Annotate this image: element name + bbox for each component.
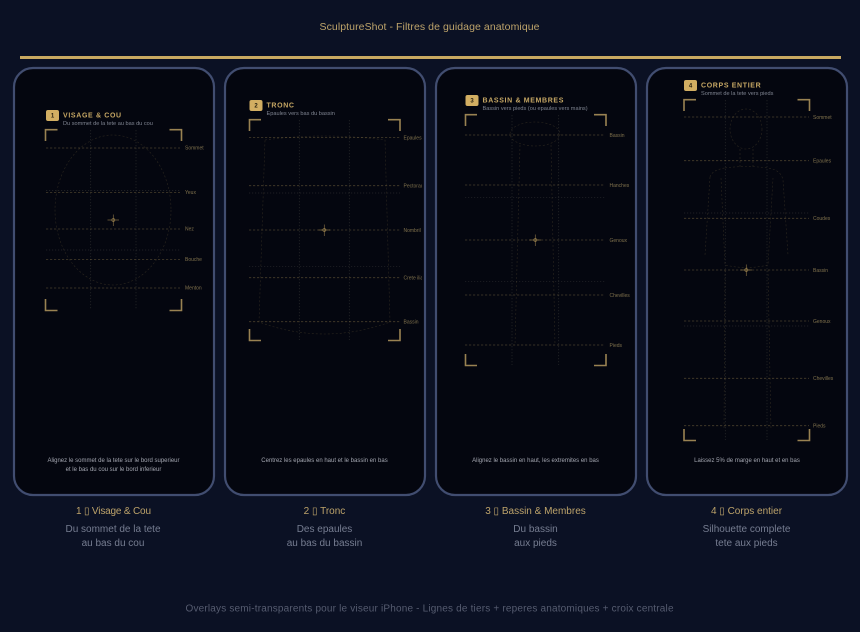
badge 3: 3 bbox=[470, 98, 474, 104]
landmark labels 1: Menton bbox=[185, 286, 202, 292]
instruction note 1 bbox=[47, 458, 180, 473]
badge 2: 2 bbox=[254, 104, 258, 110]
landmark labels 4: Coudes bbox=[813, 216, 831, 222]
heading: bassin et membres: BASSIN & MEMBRES bbox=[482, 98, 564, 104]
landmark labels 4 bbox=[813, 115, 834, 430]
frame brackets 3 bbox=[466, 115, 606, 366]
face oval guide bbox=[55, 135, 171, 285]
heading: visage et cou: VISAGE & COU bbox=[63, 112, 122, 120]
center cross 2 bbox=[318, 224, 330, 236]
center cross 3 bbox=[530, 234, 541, 246]
torso outline guide bbox=[259, 136, 390, 334]
caption 1 bbox=[65, 506, 161, 549]
panel: corps entier bbox=[647, 68, 847, 495]
anatomical landmark lines 2 bbox=[249, 138, 400, 322]
landmark labels 4: Bassin bbox=[813, 268, 828, 274]
landmark labels 2: Epaules bbox=[404, 135, 422, 141]
instruction note 2: Centrez les epaules en haut et le bassin en bas bbox=[261, 458, 388, 464]
body silhouette guide bbox=[705, 109, 788, 430]
landmark labels 4: Genoux bbox=[813, 319, 831, 325]
landmark labels 3: Hanches bbox=[610, 183, 630, 189]
badge 4 bbox=[684, 80, 697, 91]
instruction note 4: Laissez 5% de marge en haut et en bas bbox=[694, 458, 800, 464]
panel: visage et cou bbox=[14, 68, 214, 495]
instruction note 1: Alignez le sommet de la tete sur le bord superieur bbox=[47, 458, 180, 464]
panel: bassin et membres bbox=[436, 68, 636, 495]
caption 4: 4 ▯ Corps entier bbox=[711, 506, 783, 517]
landmark labels 3: Pieds bbox=[610, 343, 623, 349]
caption 3: Du bassin bbox=[513, 524, 558, 535]
caption 3: 3 ▯ Bassin & Membres bbox=[485, 506, 586, 517]
anatomical landmark lines 4 bbox=[684, 117, 809, 426]
landmark labels 3 bbox=[610, 133, 630, 349]
center cross 4 bbox=[740, 264, 752, 276]
caption 3: aux pieds bbox=[514, 538, 557, 549]
badge 4: 4 bbox=[689, 84, 693, 90]
landmark labels 4: Chevilles bbox=[813, 376, 834, 382]
landmark labels 4: Sommet bbox=[813, 115, 832, 121]
anatomical landmark lines 3 bbox=[465, 135, 605, 345]
caption 1: au bas du cou bbox=[82, 538, 144, 549]
landmark labels 1: Yeux bbox=[185, 190, 196, 196]
landmark labels 1: Nez bbox=[185, 227, 194, 233]
caption 2: 2 ▯ Tronc bbox=[304, 506, 345, 517]
landmark labels 2: Crete iliaque bbox=[404, 276, 432, 282]
anatomical landmark lines 1 bbox=[46, 148, 180, 288]
footer note: Overlays semi-transparents pour le viseur iPhone - Lignes de tiers + reperes anatomiques + croix centrale bbox=[186, 604, 674, 614]
landmark labels 4: Epaules bbox=[813, 158, 832, 164]
instruction note 1: et le bas du cou sur le bord inferieur bbox=[66, 467, 161, 473]
thirds grid 2 bbox=[249, 120, 400, 340]
caption 4 bbox=[703, 506, 791, 549]
caption 4: Silhouette complete bbox=[703, 524, 791, 535]
landmark labels 1: Bouche bbox=[185, 257, 202, 263]
landmark labels 2: Pectoraux bbox=[404, 184, 427, 190]
panel: tronc bbox=[225, 68, 432, 495]
heading: tronc: TRONC bbox=[266, 102, 295, 110]
gold header rule bbox=[20, 56, 841, 59]
caption 2: Des epaules bbox=[297, 524, 352, 535]
thirds grid 3 bbox=[465, 115, 605, 365]
caption 4: tete aux pieds bbox=[715, 538, 778, 549]
badge 2 bbox=[250, 100, 262, 111]
title: SculptureShot - Filtres de guidage anatomique bbox=[320, 21, 540, 33]
subtitle 1: Du sommet de la tete au bas du cou bbox=[63, 121, 153, 127]
thirds grid 1 bbox=[46, 130, 180, 310]
thirds grid 4 bbox=[684, 100, 809, 440]
landmark labels 3: Genoux bbox=[610, 238, 628, 244]
landmark labels 1: Sommet bbox=[185, 146, 204, 152]
caption 1: Du sommet de la tete bbox=[65, 524, 161, 535]
badge 3 bbox=[466, 95, 478, 106]
frame brackets 1 bbox=[46, 130, 182, 310]
landmark labels 3: Bassin bbox=[610, 133, 625, 139]
badge 1 bbox=[46, 110, 59, 121]
caption 1: 1 ▯ Visage & Cou bbox=[76, 506, 151, 517]
landmark labels 2 bbox=[404, 136, 422, 324]
center cross 1 bbox=[108, 214, 119, 226]
caption 2 bbox=[287, 506, 362, 549]
pelvis and legs guide bbox=[510, 122, 560, 345]
landmark labels 4: Pieds bbox=[813, 424, 826, 430]
subtitle 2: Epaules vers bas du bassin bbox=[266, 111, 335, 117]
subtitle 3: Bassin vers pieds (ou epaules vers mains) bbox=[482, 106, 588, 112]
caption 3 bbox=[485, 506, 586, 549]
landmark labels 2: Nombril bbox=[404, 228, 421, 234]
badge 1: 1 bbox=[51, 114, 55, 120]
landmark labels 1 bbox=[185, 146, 204, 292]
subtitle 4: Sommet de la tete vers pieds bbox=[701, 91, 774, 97]
caption 2: au bas du bassin bbox=[287, 538, 362, 549]
instruction note 3: Alignez le bassin en haut, les extremites en bas bbox=[472, 458, 599, 464]
heading: corps entier: CORPS ENTIER bbox=[701, 82, 761, 90]
frame brackets 2 bbox=[250, 120, 400, 340]
frame brackets 4 bbox=[684, 100, 810, 440]
landmark labels 3: Chevilles bbox=[610, 293, 630, 299]
landmark labels 2: Bassin bbox=[404, 320, 419, 326]
